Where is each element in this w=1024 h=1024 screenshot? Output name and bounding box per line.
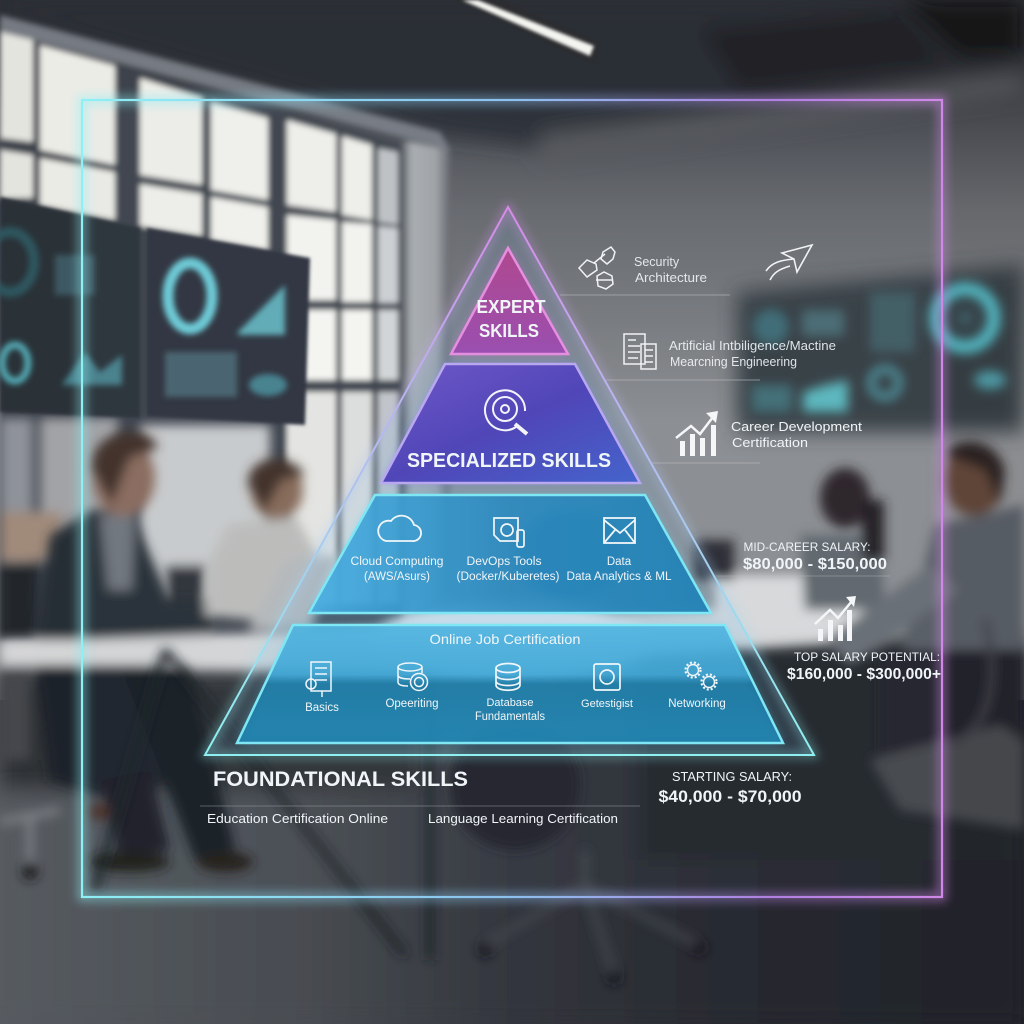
- text: geotestigist: Getestigist: [581, 698, 633, 710]
- tier: applied skills: [309, 495, 711, 613]
- text: certification: Certification: [732, 435, 808, 450]
- window wall: [0, 32, 402, 640]
- label: TOP SALARY POTENTIAL:: [794, 650, 940, 664]
- text: database: Database: [486, 697, 534, 709]
- ceiling: [0, 0, 1024, 150]
- icon: growth chart: [676, 411, 718, 456]
- woman right: [820, 468, 870, 528]
- man right: [944, 444, 1004, 516]
- text: fundamentals: Fundamentals: [475, 711, 545, 723]
- text: analytics: Data Analytics & ML: [566, 571, 672, 583]
- text: cloud computing: Cloud Computing: [350, 556, 444, 568]
- text: basics: Basics: [305, 702, 339, 714]
- heading: online job certification: Online Job Certification: [430, 631, 580, 647]
- wall displays left: [0, 197, 140, 418]
- foundational skills heading: FOUNDATIONAL SKILLS: [213, 767, 468, 791]
- icon: salary growth chart: [815, 596, 856, 641]
- icon: paper plane: [766, 245, 812, 280]
- specialized skills label: SPECIALIZED SKILLS: [407, 450, 611, 472]
- text: devops: DevOps Tools: [466, 556, 542, 568]
- text: aws: (AWS/Asurs): [364, 571, 430, 583]
- callout: top salary: [787, 650, 941, 683]
- icon: envelope: [604, 518, 635, 543]
- language certification: Language Learning Certification: [428, 811, 618, 826]
- window panes A: [0, 32, 33, 142]
- icon: security nodes: [579, 247, 615, 289]
- text: data: Data: [607, 556, 632, 568]
- shoes: [90, 852, 170, 872]
- text: docker: (Docker/Kuberetes): [456, 571, 560, 583]
- ceiling light: [455, 0, 600, 64]
- man left: [35, 510, 215, 640]
- lower window: [0, 418, 33, 563]
- callout: security: [560, 245, 812, 295]
- callout: starting salary: [658, 770, 802, 806]
- text: ai: Artificial Intbiligence/Mactine: [669, 339, 836, 353]
- rule: [560, 294, 730, 296]
- callout: career development: [652, 411, 862, 463]
- text: career: Career Development: [731, 419, 862, 434]
- expert skills label line 2: SKILLS: [479, 321, 539, 341]
- text: security: Security: [634, 255, 680, 269]
- education certification: Education Certification Online: [207, 811, 388, 826]
- callout: ai ml: [606, 334, 836, 380]
- icon: devops: [494, 518, 524, 547]
- icon: cloud: [378, 516, 421, 541]
- window panes C: [287, 120, 336, 212]
- rule: [652, 462, 760, 464]
- beam: [0, 15, 450, 150]
- person white shirt: [205, 515, 320, 625]
- seat right: [870, 725, 1024, 830]
- rule: [606, 379, 760, 381]
- wall display right content: [936, 289, 994, 347]
- window panes B: [140, 78, 202, 185]
- glass frame: [82, 100, 942, 897]
- expert skills label: EXPERT: [476, 297, 546, 317]
- label: MID-CAREER SALARY:: [744, 540, 870, 554]
- floor: [0, 670, 1024, 1024]
- blue reflected shapes: [515, 510, 625, 600]
- text: operating: Opeeriting: [385, 698, 439, 710]
- icon: database: [496, 664, 520, 690]
- icon: certificate square: [594, 664, 620, 690]
- text: networking: Networking: [668, 698, 726, 710]
- icon: basics document: [306, 662, 331, 697]
- tier: foundational: [237, 625, 783, 743]
- chair centre: [450, 720, 580, 850]
- text: architecture: Architecture: [635, 271, 707, 285]
- label: STARTING SALARY:: [672, 770, 792, 784]
- icon: documents: [624, 334, 656, 369]
- shadow under table: [0, 670, 420, 790]
- foundational divider: [200, 805, 640, 807]
- icon: operating database: [398, 663, 428, 690]
- trousers: [35, 665, 195, 800]
- icon: gears: [686, 662, 716, 690]
- rule: [716, 575, 890, 577]
- wall display right: [737, 265, 1024, 432]
- callout: mid-career salary: [716, 540, 890, 576]
- tier: specialized skills: [381, 364, 640, 483]
- value: $160,000 - $300,000+: [787, 666, 941, 683]
- value: $80,000 - $150,000: [743, 556, 887, 573]
- icon: target search: [485, 390, 527, 434]
- pyramid outline: [205, 207, 814, 755]
- tier: expert skills: [451, 248, 568, 354]
- display left content: [168, 263, 212, 329]
- left chair: [0, 670, 30, 760]
- table legs: [95, 650, 430, 960]
- text: ml: Mearcning Engineering: [670, 355, 797, 369]
- value: $40,000 - $70,000: [658, 788, 802, 806]
- table: [0, 603, 870, 672]
